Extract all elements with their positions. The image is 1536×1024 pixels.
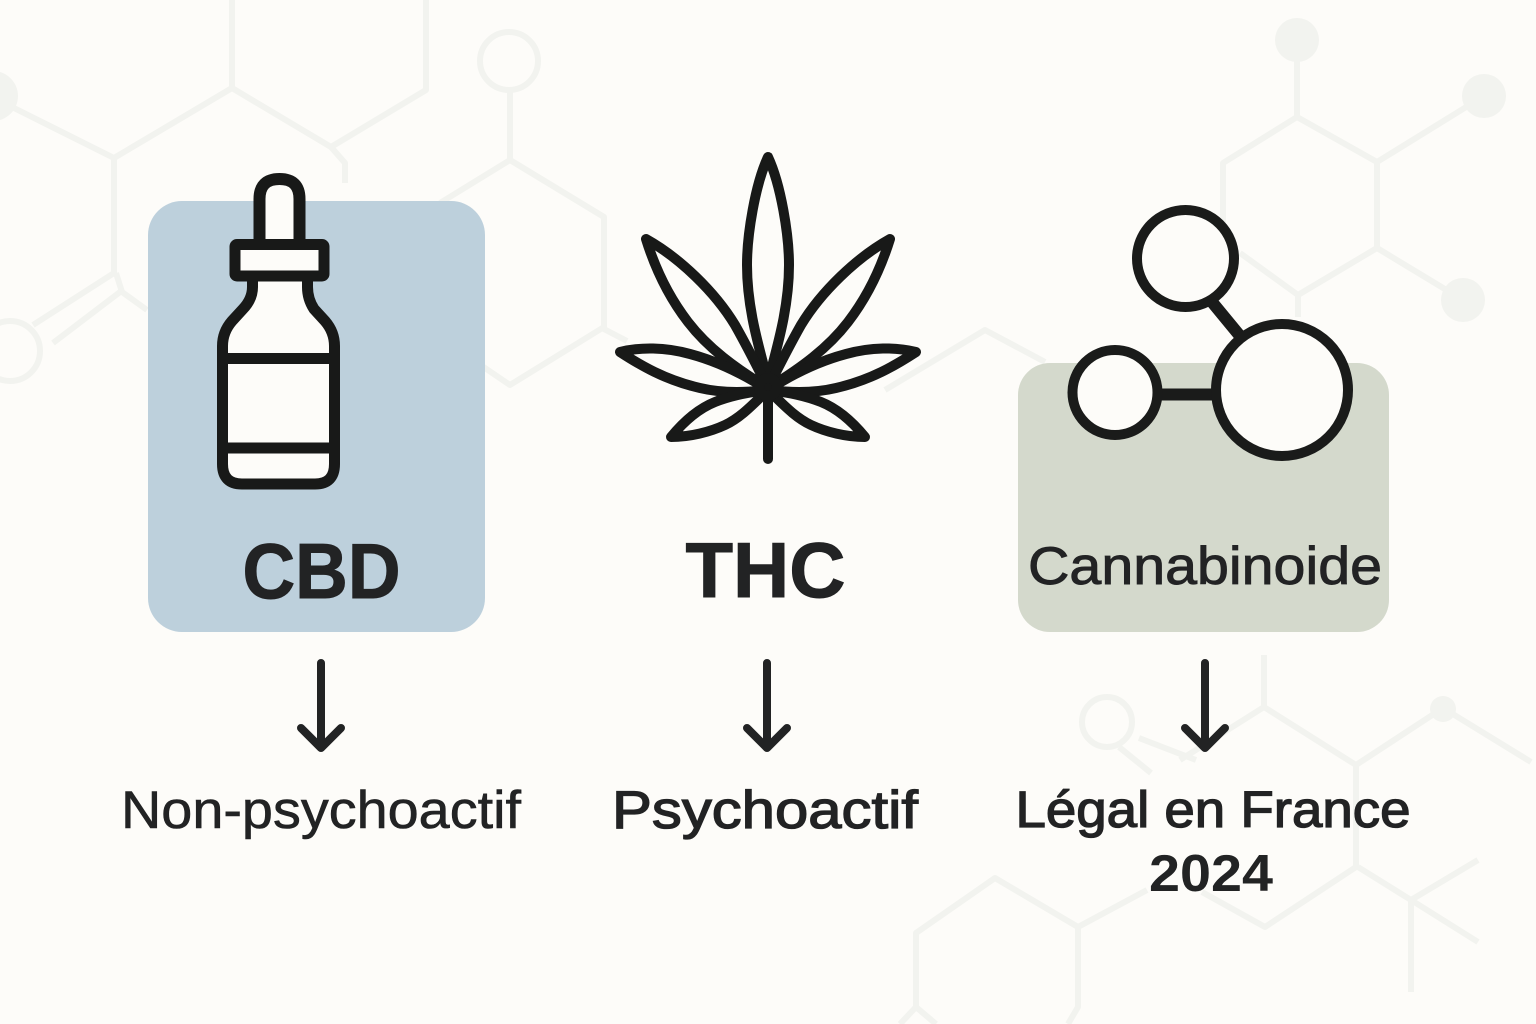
arrow: Cannabinoide	[1185, 663, 1225, 748]
Cannabinoide background	[1018, 363, 1389, 632]
panel: THC	[620, 157, 916, 614]
arrow: THC	[747, 663, 787, 748]
CBD label: CBD	[242, 527, 400, 615]
icon: dropper bottle	[222, 179, 334, 484]
text: Psychoactif: Psychoactif	[612, 781, 918, 840]
panel: Cannabinoide	[1018, 210, 1389, 632]
text: Légal en France 2024	[1016, 781, 1410, 903]
THC label: THC	[686, 526, 846, 614]
icon: cannabis leaf	[620, 157, 916, 459]
arrow: CBD	[301, 663, 341, 748]
icon: molecule	[1072, 210, 1348, 456]
CBD background	[148, 201, 485, 632]
text: Légal en France 2024: 2024	[1149, 845, 1273, 903]
panel: CBD	[148, 179, 485, 632]
text: Non-psychoactif: Non-psychoactif	[121, 781, 521, 840]
Cannabinoide label: Cannabinoide	[1028, 537, 1382, 596]
text: Légal en France 2024: Légal en France	[1016, 781, 1410, 838]
